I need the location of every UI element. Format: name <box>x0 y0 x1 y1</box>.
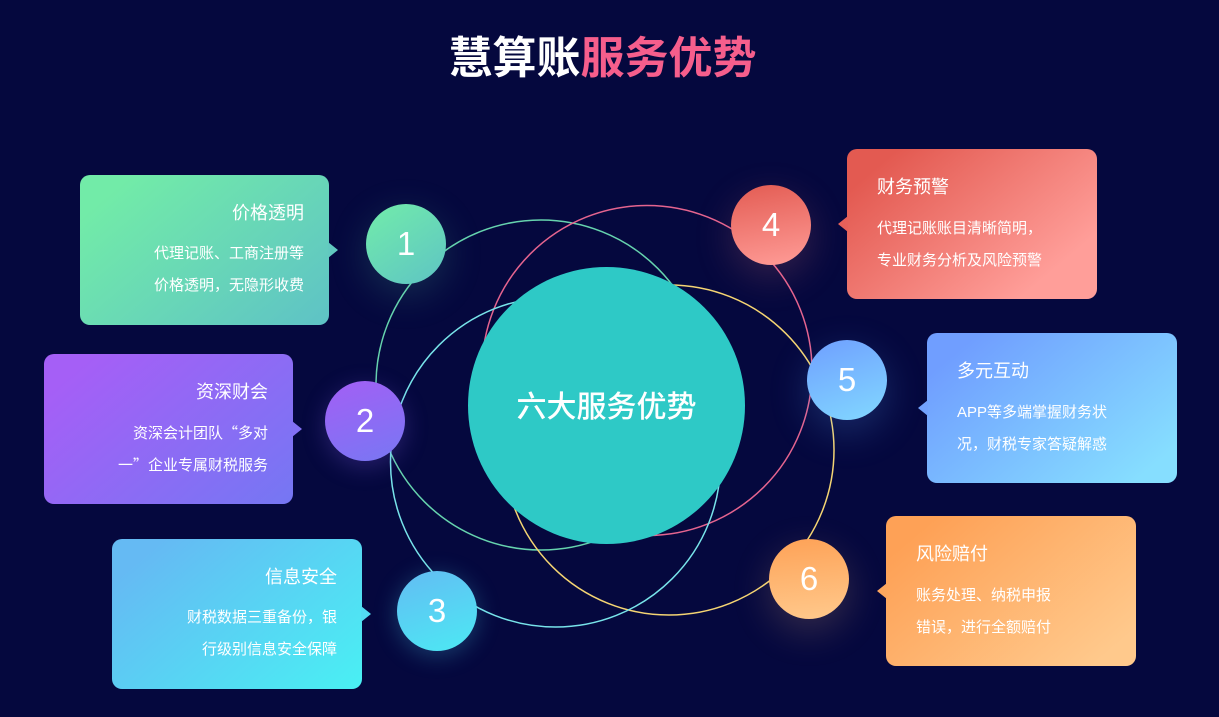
text line: 价格透明，无隐形收费 <box>154 277 304 294</box>
panel: 4 financial warning <box>847 149 1097 299</box>
heading: 信息安全 <box>265 567 337 587</box>
panel: 5 multi-channel interaction <box>927 333 1177 483</box>
heading: 多元互动 <box>957 361 1029 381</box>
text line: 专业财务分析及风险预警 <box>877 252 1042 269</box>
heading: 价格透明 <box>232 203 304 223</box>
text line: 财税数据三重备份，银 <box>187 609 337 626</box>
icon: number 4 <box>731 185 811 265</box>
panel: 3 information security <box>112 539 362 689</box>
panel: 6 risk compensation <box>886 516 1136 666</box>
central circle: 六大服务优势 <box>516 391 696 424</box>
icon: number 5: 5 <box>838 361 856 398</box>
heading: 财务预警 <box>877 177 949 197</box>
icon: number 6: 6 <box>800 560 818 597</box>
icon: number 3 <box>397 571 477 651</box>
panel: 2 senior accountants <box>44 354 293 504</box>
icon: number 2: 2 <box>356 402 374 439</box>
icon: number 5 <box>807 340 887 420</box>
text line: 代理记账账目清晰简明， <box>877 220 1042 237</box>
heading: 风险赔付 <box>916 544 988 564</box>
icon: number 2 <box>325 381 405 461</box>
panel: 1 price transparency <box>80 175 329 325</box>
icon: number 6 <box>769 539 849 619</box>
icon: number 3: 3 <box>428 592 446 629</box>
text line: 况，财税专家答疑解惑 <box>957 436 1107 453</box>
icon: number 4: 4 <box>762 206 780 243</box>
text line: 代理记账、工商注册等 <box>154 245 304 262</box>
heading: 资深财会 <box>196 382 268 402</box>
icon: number 1 <box>366 204 446 284</box>
text line: 错误，进行全额赔付 <box>916 619 1051 636</box>
text line: 一”企业专属财税服务 <box>118 454 268 475</box>
text line: 资深会计团队“多对 <box>133 422 268 443</box>
text line: 账务处理、纳税申报 <box>916 587 1051 604</box>
text line: APP等多端掌握财务状 <box>957 404 1107 421</box>
title: 慧算账服务优势 <box>448 34 756 83</box>
text line: 行级别信息安全保障 <box>202 641 337 658</box>
central circle <box>468 267 745 544</box>
icon: number 1: 1 <box>397 225 415 262</box>
